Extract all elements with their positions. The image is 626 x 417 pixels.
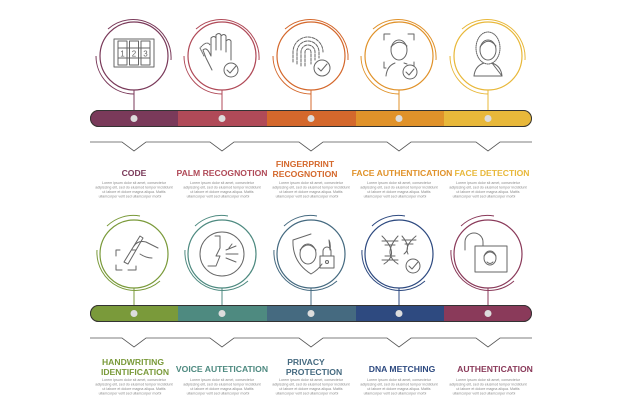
body text: top: Lorem ipsum dolor sit amet, consectetur	[279, 181, 344, 185]
body text: bottom: ut labore et dolore magna aliqua. Mattis	[190, 387, 254, 391]
labels: bottom: VOICE AUTETICATION	[176, 364, 268, 374]
body text: top: ut labore et dolore magna aliqua. Mattis	[190, 190, 254, 194]
body text: top: adipiscing elit, sed do eiusmod tempor incididunt	[272, 186, 350, 190]
circle: privacy	[274, 215, 345, 305]
body text: bottom: ullamcorper velit sed ullamcorper morbi	[99, 392, 162, 396]
body text: bottom: ut labore et dolore magna aliqua. Mattis	[456, 387, 520, 391]
circle: face detection	[450, 20, 525, 110]
body text: top: ullamcorper velit sed ullamcorper morbi	[187, 194, 250, 198]
circle: DNA	[362, 215, 433, 305]
labels: top: RECOGNOTION	[273, 169, 337, 179]
labels: bottom: HANDWRITING	[102, 357, 164, 367]
bottom row	[90, 215, 533, 396]
top row	[90, 20, 532, 198]
body text: top: Lorem ipsum dolor sit amet, consectetur	[367, 181, 432, 185]
body text: bottom: adipiscing elit, sed do eiusmod tempor incididunt	[183, 382, 261, 386]
body text: bottom: ullamcorper velit sed ullamcorper morbi	[187, 392, 250, 396]
circle: face authentication	[361, 20, 436, 110]
bottom bar	[90, 305, 532, 322]
body text: top: adipiscing elit, sed do eiusmod tempor incididunt	[95, 186, 173, 190]
top chevron line	[90, 142, 532, 151]
bottom chevron line	[90, 338, 532, 347]
body text: bottom: adipiscing elit, sed do eiusmod tempor incididunt	[95, 382, 173, 386]
labels: bottom: PRIVACY	[287, 357, 325, 367]
body text: bottom: ullamcorper velit sed ullamcorper morbi	[453, 392, 516, 396]
body text: top: Lorem ipsum dolor sit amet, consectetur	[102, 181, 167, 185]
body text: bottom: adipiscing elit, sed do eiusmod tempor incididunt	[272, 382, 350, 386]
labels: top: FACE DETECTION	[455, 168, 529, 178]
labels: top: FACE AUTHENTICATION	[352, 168, 452, 178]
body text: bottom: ut labore et dolore magna aliqua. Mattis	[279, 387, 343, 391]
circle: palm	[184, 20, 259, 110]
circle: handwriting	[97, 215, 168, 305]
labels: top: FINGERPRINT	[276, 159, 335, 169]
body text: bottom: ut labore et dolore magna aliqua. Mattis	[102, 387, 166, 391]
body text: top: ullamcorper velit sed ullamcorper morbi	[99, 194, 162, 198]
labels: top	[122, 159, 529, 179]
labels: bottom: IDENTIFICATION	[101, 367, 169, 377]
labels: bottom	[101, 357, 533, 377]
body text: top: ut labore et dolore magna aliqua. Mattis	[102, 190, 166, 194]
circle: code: 1	[120, 50, 125, 58]
body text: top: ullamcorper velit sed ullamcorper morbi	[276, 194, 339, 198]
circle: code	[96, 20, 171, 110]
circle: code: 2	[132, 50, 137, 58]
body text: bottom: adipiscing elit, sed do eiusmod tempor incididunt	[360, 382, 438, 386]
body text: bottom	[95, 378, 527, 396]
body text: top: ullamcorper velit sed ullamcorper morbi	[453, 194, 516, 198]
body text: bottom: Lorem ipsum dolor sit amet, consectetur	[456, 378, 521, 382]
circle: authentication	[451, 215, 522, 305]
body text: top: Lorem ipsum dolor sit amet, consectetur	[456, 181, 521, 185]
body text: bottom: ullamcorper velit sed ullamcorper morbi	[276, 392, 339, 396]
circle: voice	[185, 215, 256, 305]
labels: top: PALM RECOGNOTION	[176, 168, 268, 178]
body text: bottom: adipiscing elit, sed do eiusmod tempor incididunt	[449, 382, 527, 386]
labels: bottom: PROTECTION	[286, 367, 342, 377]
circle: fingerprint	[273, 20, 348, 110]
body text: bottom: Lorem ipsum dolor sit amet, consectetur	[190, 378, 255, 382]
body text: top: ullamcorper velit sed ullamcorper morbi	[364, 194, 427, 198]
body text: top: Lorem ipsum dolor sit amet, consectetur	[190, 181, 255, 185]
body text: top	[95, 181, 527, 198]
body text: top: adipiscing elit, sed do eiusmod tempor incididunt	[360, 186, 438, 190]
body text: top: adipiscing elit, sed do eiusmod tempor incididunt	[449, 186, 527, 190]
circle: code: 3	[143, 50, 148, 58]
top bar	[90, 110, 532, 127]
body text: bottom: Lorem ipsum dolor sit amet, consectetur	[279, 378, 344, 382]
labels: bottom: DNA METCHING	[369, 364, 436, 374]
body text: top: ut labore et dolore magna aliqua. Mattis	[367, 190, 431, 194]
body text: bottom: ut labore et dolore magna aliqua. Mattis	[367, 387, 431, 391]
labels: bottom: AUTHENTICATION	[457, 364, 533, 374]
body text: top: adipiscing elit, sed do eiusmod tempor incididunt	[183, 186, 261, 190]
body text: bottom: Lorem ipsum dolor sit amet, consectetur	[367, 378, 432, 382]
body text: top: ut labore et dolore magna aliqua. Mattis	[456, 190, 520, 194]
body text: bottom: ullamcorper velit sed ullamcorper morbi	[364, 392, 427, 396]
labels: top: CODE	[122, 168, 147, 178]
body text: top: ut labore et dolore magna aliqua. Mattis	[279, 190, 343, 194]
body text: bottom: Lorem ipsum dolor sit amet, consectetur	[102, 378, 167, 382]
